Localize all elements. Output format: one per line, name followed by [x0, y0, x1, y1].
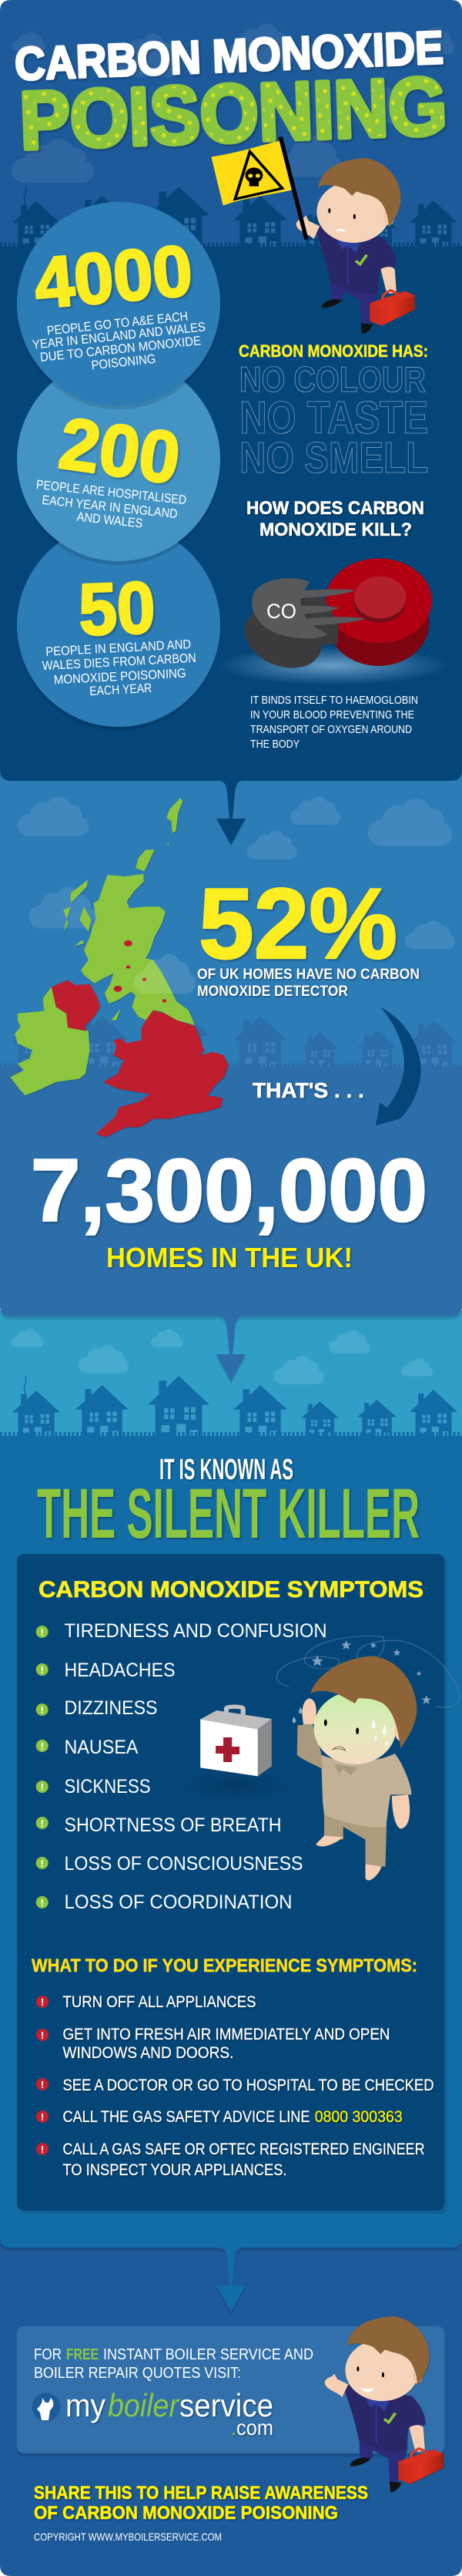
clouds [18, 796, 455, 949]
section 3: the silent killer [0, 1310, 462, 2312]
promo text: FREE [66, 2346, 99, 2363]
fact circle: 200: EACH YEAR IN ENGLAND [42, 493, 179, 521]
outlined properties [239, 359, 428, 483]
actions list [36, 1993, 434, 2179]
logo: myboilerservice.com: service [179, 2387, 273, 2423]
clouds [11, 1330, 433, 1384]
promo text: FOR [34, 2346, 62, 2363]
promo text [34, 2346, 313, 2382]
symptoms heading: CARBON MONOXIDE SYMPTOMS [38, 1577, 424, 1602]
statistic caption: MONOXIDE DETECTOR [197, 984, 348, 1000]
symptoms list: SICKNESS [65, 1776, 151, 1797]
actions list: ! [41, 2111, 44, 2123]
fact circle: 200 [17, 358, 220, 565]
actions heading: WHAT TO DO IF YOU EXPERIENCE SYMPTOMS: [32, 1956, 417, 1976]
fact circle: 50: 50 [78, 567, 156, 651]
symptoms list: ! [41, 1704, 44, 1716]
England and Wales [95, 1011, 229, 1137]
symptoms list: LOSS OF CONSCIOUSNESS [65, 1853, 303, 1875]
fact circle: 4000: PEOPLE GO TO A&E EACH [46, 309, 189, 338]
cloud over the map [134, 954, 196, 994]
fact circle: 4000 [17, 202, 220, 409]
actions list: TURN OFF ALL APPLIANCES [63, 1993, 256, 2011]
panel: symptoms and actions [17, 1554, 460, 2211]
icon: warning flag [211, 137, 306, 240]
section 4: call to action background [0, 2235, 462, 2576]
actions list: ! [41, 2144, 44, 2155]
fact circle: 4000: YEAR IN ENGLAND AND WALES [32, 320, 206, 352]
actions list: WINDOWS AND DOORS. [63, 2044, 234, 2062]
question heading [246, 498, 424, 540]
icon: CO binding to haemoglobin [218, 558, 448, 684]
actions list: CALL THE GAS SAFETY ADVICE LINE [63, 2108, 310, 2126]
fact circle: 50 [17, 523, 220, 731]
icon: wrench [32, 2393, 60, 2422]
symptoms list: DIZZINESS [65, 1697, 157, 1719]
homes in the UK: HOMES IN THE UK! [106, 1242, 353, 1273]
Scotland and northern England [81, 874, 195, 1025]
actions list: ! [41, 1996, 44, 2008]
houses [0, 1007, 462, 1067]
outlined properties: NO SMELL [239, 433, 428, 483]
share message [34, 2483, 368, 2524]
copyright: COPYRIGHT WWW.MYBOILERSERVICE.COM [34, 2531, 222, 2543]
worker holding warning flag [211, 137, 415, 334]
Northern Ireland [52, 980, 100, 1031]
explanation text: THE BODY [250, 738, 300, 751]
carbon monoxide has: CARBON MONOXIDE HAS: [239, 341, 428, 361]
clouds [12, 24, 454, 183]
symptoms list: LOSS OF COORDINATION [65, 1892, 293, 1913]
actions list: GET INTO FRESH AIR IMMEDIATELY AND OPEN [63, 2026, 390, 2043]
actions list: 0800 300363 [315, 2108, 403, 2126]
actions list: ! [41, 2030, 44, 2041]
that's: THAT'S . . . [253, 1078, 364, 1102]
symptoms list [36, 1620, 326, 1913]
icon: CO binding to haemoglobin: CO [266, 600, 296, 623]
houses [0, 1376, 462, 1436]
actions list: ! [41, 2079, 44, 2090]
promo text: BOILER REPAIR QUOTES VISIT: [34, 2365, 241, 2382]
symptoms list: HEADACHES [65, 1660, 176, 1681]
sick person illustration [276, 1636, 460, 1880]
fact circle: 4000: 4000 [32, 230, 196, 324]
symptoms list: ! [41, 1818, 44, 1829]
symptoms list: TIREDNESS AND CONFUSION [65, 1620, 326, 1642]
section 2: UK statistics [0, 771, 462, 1381]
section 1: header and key facts [0, 0, 462, 846]
fact circle: 50: PEOPLE IN ENGLAND AND [45, 637, 192, 659]
call to action panel [17, 2326, 444, 2453]
actions list: TO INSPECT YOUR APPLIANCES. [63, 2161, 286, 2179]
heading: it is known as: IT IS KNOWN AS [159, 1454, 293, 1486]
fact circle: 50: MONOXIDE POISONING [53, 667, 186, 687]
symptoms list: ! [41, 1897, 44, 1908]
fact circle: 50: EACH YEAR [89, 681, 152, 698]
symptoms list: ! [41, 1740, 44, 1752]
explanation text [250, 694, 418, 751]
explanation text: TRANSPORT OF OXYGEN AROUND [250, 723, 412, 736]
curved arrow [376, 1007, 421, 1125]
question heading: MONOXIDE KILL? [259, 520, 412, 540]
fact circle: 50: WALES DIES FROM CARBON [42, 651, 196, 673]
city markers [114, 940, 166, 1003]
logo: myboilerservice.com: boiler [108, 2387, 180, 2423]
symptoms list: ! [41, 1781, 44, 1793]
52 percent statistic: 52% [199, 867, 397, 980]
statistic caption: OF UK HOMES HAVE NO CARBON [197, 967, 420, 983]
stars [311, 1640, 431, 1704]
symptoms list: ! [41, 1858, 44, 1869]
logo: myboilerservice.com [32, 2387, 273, 2440]
7,300,000: 7,300,000 [31, 1142, 427, 1240]
worker pointing at the panel [325, 2316, 444, 2492]
Republic of Ireland [10, 987, 90, 1095]
icon: first aid kit [174, 1707, 297, 1804]
fact circle: 4000: DUE TO CARBON MONOXIDE [39, 334, 202, 365]
promo text: INSTANT BOILER SERVICE AND [103, 2346, 313, 2363]
share message: OF CARBON MONOXIDE POISONING [34, 2503, 338, 2524]
symptoms list: ! [41, 1664, 44, 1676]
question heading: HOW DOES CARBON [246, 498, 424, 519]
explanation text: IT BINDS ITSELF TO HAEMOGLOBIN [250, 694, 418, 707]
dizzy swirl [276, 1636, 460, 1707]
share message: SHARE THIS TO HELP RAISE AWARENESS [34, 2483, 368, 2504]
islands [63, 798, 182, 1021]
logo: myboilerservice.com: my [65, 2387, 105, 2423]
houses [0, 187, 462, 247]
logo: myboilerservice.com: .com [231, 2416, 273, 2440]
explanation text: IN YOUR BLOOD PREVENTING THE [250, 708, 414, 721]
map of the UK and Ireland [10, 798, 229, 1137]
fact circle: 4000: POISONING [91, 352, 156, 372]
outlined properties: NO COLOUR [239, 359, 426, 399]
symptoms list: SHORTNESS OF BREATH [65, 1814, 282, 1836]
fact circle: 200: 200 [55, 402, 185, 500]
fact circle: 200: AND WALES [76, 510, 143, 530]
worried mouth [335, 228, 345, 232]
symptoms list: ! [41, 1626, 44, 1638]
symptoms list: NAUSEA [65, 1737, 139, 1758]
outlined properties: NO TASTE [239, 392, 428, 443]
statistic caption [197, 967, 420, 1000]
panel: symptoms shadow [20, 1557, 447, 2214]
fact circle: 200: PEOPLE ARE HOSPITALISED [35, 478, 187, 507]
